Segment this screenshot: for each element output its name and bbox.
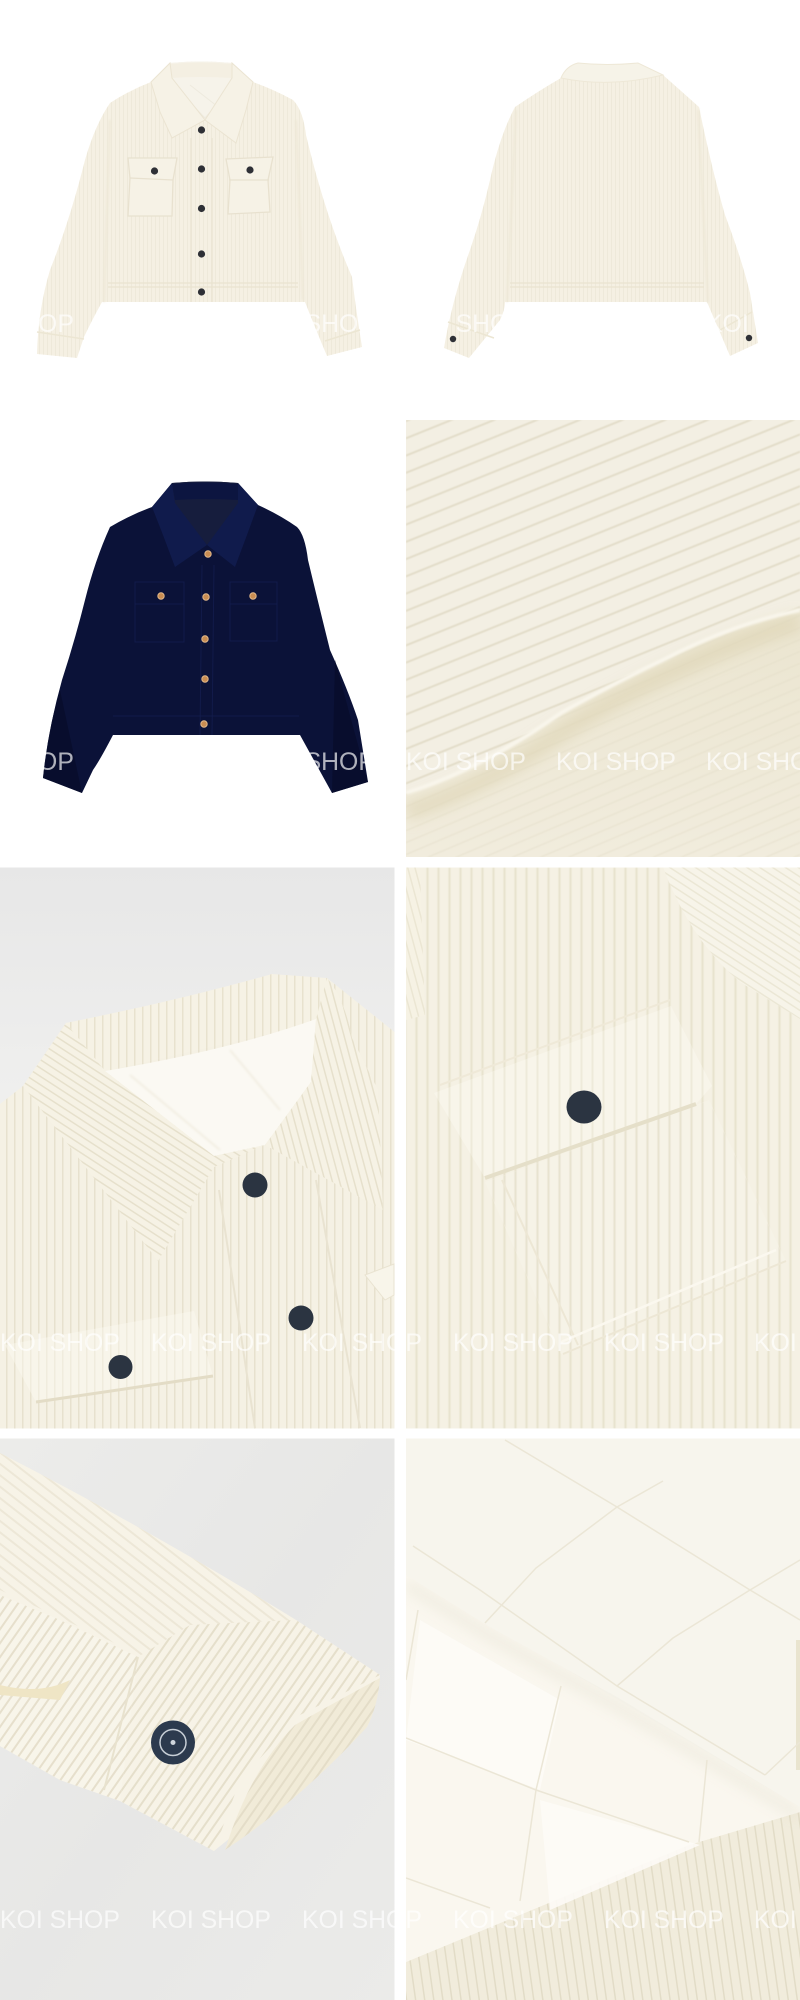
- quilted lining: [105, 1019, 316, 1156]
- quilting stitches: [406, 1440, 800, 1908]
- buttons: [151, 126, 254, 296]
- watermark row 3: KOI SHOP: [302, 1330, 422, 1357]
- collar stand and lining: [170, 62, 236, 122]
- photo: quilted lining close-up: [406, 1438, 800, 2000]
- cuffs: [37, 330, 360, 341]
- sleeve gather: [0, 1595, 138, 1801]
- sleeve: [0, 1453, 380, 1851]
- tan buttons: [158, 551, 256, 727]
- photo: navy jacket: [43, 482, 368, 793]
- photo: cuff close-up: [0, 1438, 394, 2000]
- placket: [191, 138, 212, 302]
- placket seams: [219, 1180, 360, 1428]
- pocket edge: [365, 1264, 394, 1300]
- back collar: [561, 63, 663, 82]
- upper quilted flap: [406, 1438, 800, 1807]
- pockets: [128, 158, 177, 216]
- pocket button: [566, 1090, 602, 1124]
- cuff button: [151, 1720, 195, 1764]
- watermark row 1: KOI SHOP: [255, 311, 375, 338]
- photo: chest pocket close-up: [406, 867, 800, 1428]
- lower fold of fabric: [406, 610, 800, 857]
- cuff opening: [225, 1678, 380, 1850]
- cuff band: [142, 1620, 291, 1655]
- watermark row 1: [0, 311, 800, 338]
- watermark row 4: KOI SHOP: [0, 1907, 120, 1934]
- ribbed hem: [406, 1812, 800, 2000]
- sleeve top right: [668, 868, 792, 1014]
- hem band: [510, 283, 704, 287]
- lower quilted panel: [410, 1812, 799, 1960]
- watermark row 3: [0, 1330, 800, 1357]
- watermark row 2: KOI SHOP: [255, 749, 375, 776]
- photo: cream jacket front: [37, 62, 362, 358]
- cuff buttons: [450, 335, 752, 342]
- pocket body: [485, 1100, 786, 1354]
- watermark row 4: [0, 1907, 800, 1934]
- photo: corduroy fabric close-up: [406, 420, 800, 857]
- navy pockets: [135, 582, 277, 642]
- small pocket flap: [5, 1311, 213, 1402]
- watermark row 3: KOI SHOP: [453, 1330, 573, 1357]
- front collar flaps: [151, 63, 205, 138]
- watermark row 2: KOI SHOP: [406, 749, 526, 776]
- watermark row 3: KOI SHOP: [604, 1330, 724, 1357]
- watermark row 3: KOI SHOP: [151, 1330, 271, 1357]
- buttons: [108, 1172, 314, 1379]
- collar edge: [416, 868, 418, 1018]
- watermark row 2: KOI SHOP: [556, 749, 676, 776]
- shirt body: [0, 978, 394, 1428]
- hem band: [108, 283, 298, 287]
- watermark row 2: [0, 749, 800, 776]
- navy hem seam: [113, 565, 299, 735]
- cuffs: [448, 312, 752, 338]
- watermark row 3: KOI SHOP: [0, 1330, 120, 1357]
- left collar flap: [23, 1023, 265, 1261]
- watermark row 1: KOI SHOP: [406, 311, 526, 338]
- watermark row 4: KOI SHOP: [302, 1907, 422, 1934]
- upper quilted flap shadow: [406, 1584, 800, 1815]
- pocket flap: [434, 1006, 712, 1178]
- photo: cream jacket back: [444, 63, 758, 358]
- watermark row 4: KOI SHOP: [151, 1907, 271, 1934]
- photo: collar close-up: [0, 868, 394, 1428]
- watermark row 4: KOI SHOP: [453, 1907, 573, 1934]
- watermark row 4: KOI SHOP: [604, 1907, 724, 1934]
- right collar flap: [265, 978, 383, 1210]
- navy collar and neck: [172, 482, 240, 545]
- back collar stand: [83, 974, 325, 1020]
